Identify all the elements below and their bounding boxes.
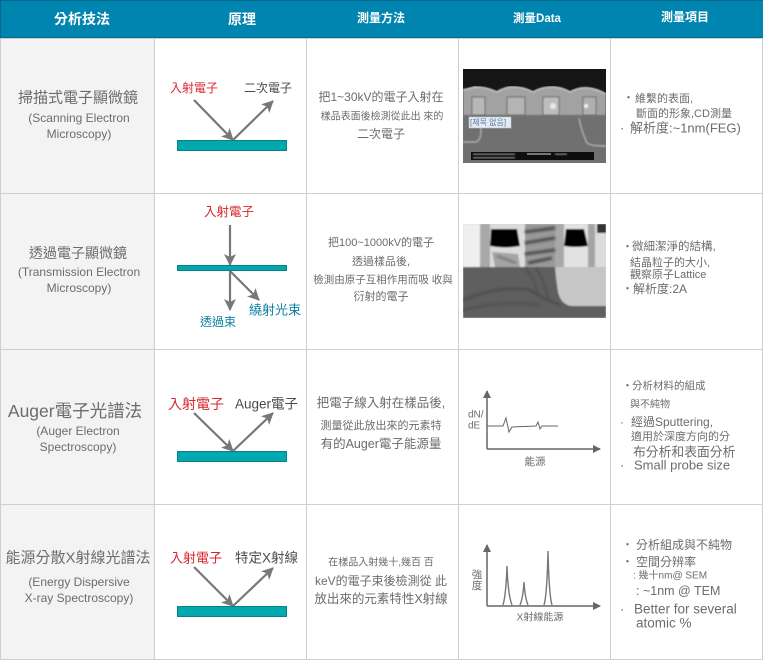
row 1: SEM technique name: (Scanning Electron (28, 111, 130, 125)
row 3: Auger technique name (8, 401, 142, 454)
row 1: SEM principle diagram: 入射電子 (170, 80, 218, 95)
row 3: Auger spectrum chart: 能源 (524, 455, 546, 468)
row 3: Auger measurement items: 與不純物 (630, 398, 670, 410)
row 3: Auger measurement items: 布分析和表面分析 (633, 444, 736, 460)
row 3: Auger method text (317, 395, 445, 451)
row 2: TEM method text: 檢測由原子互相作用而吸 收與 (313, 273, 453, 286)
row 4: EDX measurement items: : ~1nm @ TEM (636, 584, 720, 598)
row 4: EDX principle diagram (170, 550, 299, 616)
row 3: Auger measurement items: ・ (622, 380, 633, 392)
row 1: SEM technique name: 掃描式電子顯微鏡 (18, 88, 138, 106)
row 2: TEM technique name (18, 245, 140, 295)
row 3: Auger technique name: Spectroscopy) (40, 440, 116, 454)
row 3: Auger measurement items: Small probe size (634, 458, 730, 472)
header bar (0, 0, 763, 38)
row 2: TEM principle diagram (178, 204, 301, 329)
row 3: Auger measurement items (620, 379, 736, 472)
row 1: SEM measurement items: ・ (623, 92, 634, 104)
row 4: EDX measurement items: 分析組成與不純物 (636, 538, 732, 552)
row 1: SEM method text: 把1~30kV的電子入射在 (318, 89, 444, 104)
row 4: EDX measurement items: atomic % (636, 616, 692, 630)
header: technique: 分析技法 (54, 11, 110, 27)
row 1: SEM measurement items: 維繫的表面, (635, 91, 693, 105)
row 4: EDX technique name: 能源分散X射線光譜法 (5, 550, 151, 566)
row 4: EDX measurement items (620, 538, 737, 630)
row 4: EDX principle diagram: 入射電子 (170, 550, 222, 566)
row 4: EDX method text: keV的電子束後檢測從 此 (315, 573, 447, 588)
row 2: TEM method text: 衍射的電子 (354, 289, 408, 303)
row 4: EDX spectrum chart (472, 545, 600, 624)
row 3: Auger method text: 把電子線入射在樣品後, (317, 395, 445, 410)
row 2: TEM micrograph (463, 224, 606, 318)
row 4: EDX spectrum chart: 強 (472, 568, 483, 581)
row 3: Auger method text: 有的Auger電子能源量 (321, 436, 441, 451)
row 4: EDX measurement items: : 幾十nm@ SEM (633, 568, 707, 582)
row 2: TEM measurement items (622, 239, 716, 296)
row 1: SEM measurement items: 解析度:~1nm(FEG) (630, 120, 741, 136)
row 4: EDX method text: 在樣品入射幾十,幾百 百 (328, 556, 434, 568)
row 4: EDX spectrum chart: X射線能源 (517, 610, 563, 624)
row 4: EDX measurement items: Better for several (634, 602, 737, 616)
header: items: 測量項目 (661, 9, 709, 24)
row 4: EDX technique name (5, 550, 151, 605)
row 2: TEM principle diagram: 入射電子 (204, 204, 254, 219)
row 1: SEM measurement items: 斷面的形象,CD測量 (636, 106, 732, 120)
row 3: Auger measurement items: 分析材料的組成 (632, 379, 706, 392)
row 2: TEM measurement items: ・ (622, 241, 633, 253)
header: method: 測量方法 (357, 10, 405, 25)
header: data: 測量Data (513, 11, 562, 25)
row 1: SEM method text: 樣品表面後檢測從此出 來的 (321, 110, 443, 122)
row 3: Auger measurement items: · (620, 458, 624, 472)
row 3: Auger spectrum chart: dE (468, 420, 481, 432)
row 1: SEM principle diagram (170, 80, 292, 150)
row 1: SEM technique name (18, 88, 138, 141)
row 4: EDX principle diagram: 特定X射線 (235, 550, 299, 566)
row 1: SEM micrograph (463, 69, 606, 163)
row 4: EDX measurement items: ・ (622, 556, 633, 568)
row 3: Auger technique name: (Auger Electron (36, 424, 120, 438)
row 4: EDX spectrum chart: 度 (472, 579, 483, 592)
row 2: TEM principle diagram: 繞射光束 (249, 302, 301, 318)
row 2: TEM technique name: (Transmission Electron (18, 265, 140, 279)
row 4: EDX measurement items: · (620, 602, 624, 616)
row 1: SEM method text (318, 89, 444, 141)
row 1: SEM method text: 二次電子 (357, 127, 405, 141)
row 2: TEM method text: 把100~1000kV的電子 (328, 235, 434, 249)
row 2: TEM measurement items: 解析度:2A (633, 281, 687, 296)
row 2: TEM technique name: 透過電子顯微鏡 (29, 245, 127, 261)
row 2: TEM measurement items: 觀察原子Lattice (630, 267, 706, 281)
row 4: EDX technique name: (Energy Dispersive (28, 575, 130, 589)
row 4: EDX method text (314, 556, 448, 606)
image caption tag: [제목 없음] (470, 118, 506, 127)
row 2: TEM measurement items: 結晶粒子的大小, (630, 255, 710, 269)
row 2: TEM measurement items: 微細潔淨的結構, (632, 239, 716, 253)
row 3: Auger principle diagram: 入射電子 (168, 396, 224, 412)
row 2: TEM method text (313, 235, 453, 303)
row 3: Auger measurement items: · (620, 415, 624, 429)
row 3: Auger method text: 測量從此放出來的元素特 (320, 418, 442, 432)
row 3: Auger measurement items: 經過Sputtering, (631, 414, 713, 429)
row 2: TEM technique name: Microscopy) (47, 281, 111, 295)
technique column background (1, 38, 154, 659)
row 4: EDX technique name: X-ray Spectroscopy) (25, 591, 133, 605)
row 3: Auger technique name: Auger電子光譜法 (8, 401, 142, 421)
row 3: Auger principle diagram: Auger電子 (235, 396, 298, 412)
row 1: SEM measurement items (620, 91, 741, 136)
row 3: Auger principle diagram (168, 396, 298, 462)
row 2: TEM principle diagram: 透過束 (200, 314, 236, 329)
row 1: SEM measurement items: · (620, 120, 624, 136)
row 3: Auger measurement items: 適用於深度方向的分 (631, 429, 730, 443)
row 4: EDX measurement items: ・ (622, 539, 633, 551)
row 3: Auger spectrum chart (468, 391, 600, 468)
row 4: EDX method text: 放出來的元素特性X射線 (314, 591, 448, 606)
row 3: Auger spectrum chart: dN/ (468, 410, 484, 420)
row 1: SEM principle diagram: 二次電子 (244, 81, 292, 95)
row 1: SEM technique name: Microscopy) (47, 127, 111, 141)
row 2: TEM measurement items: ・ (622, 283, 633, 295)
row 2: TEM method text: 透過樣品後, (352, 254, 410, 268)
header: principle: 原理 (228, 11, 256, 27)
row 4: EDX measurement items: 空間分辨率 (636, 554, 696, 569)
